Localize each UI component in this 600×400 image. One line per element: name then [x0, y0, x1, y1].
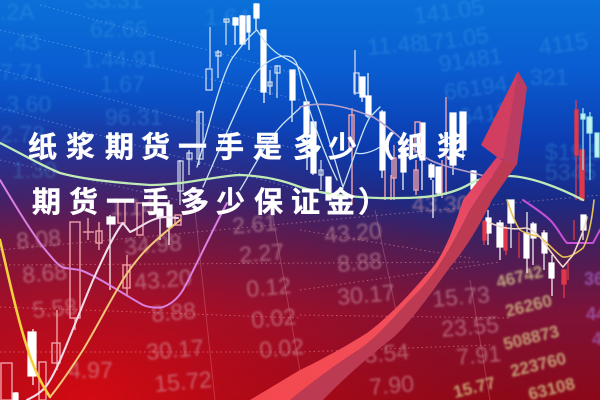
blue zone numbers: 6411 — [457, 97, 510, 130]
light numbers over purple and red zone: 15.72 — [153, 366, 213, 397]
red candles on right — [483, 100, 584, 298]
blue zone numbers: 1.67 — [100, 71, 145, 97]
blue zone numbers: 321 — [530, 64, 568, 90]
title line 1: 货 — [141, 124, 170, 166]
violet MA line — [0, 180, 227, 308]
title line 2: 金 — [326, 179, 355, 221]
light numbers over purple and red zone: 34.98 — [123, 229, 183, 260]
light numbers over purple and red zone: 0.02 — [258, 333, 305, 363]
yellow volume numbers: 508873 — [501, 322, 561, 354]
light numbers over purple and red zone: 43.20 — [323, 217, 383, 248]
title line 2: 少 — [216, 179, 245, 221]
title line 2: 多 — [180, 179, 209, 221]
blue zone numbers: 11.48 — [366, 29, 424, 60]
purple side numbers — [584, 269, 600, 349]
title line 1: 纸 — [397, 124, 426, 166]
light numbers over purple and red zone: 4.97 — [68, 357, 113, 383]
light numbers over purple and red zone: 23.55 — [440, 311, 500, 342]
light numbers over purple and red zone: 2.61 — [231, 209, 278, 239]
arrow shaft light strip — [250, 157, 503, 400]
light numbers over purple and red zone: 43.30 — [412, 191, 470, 217]
blue zone numbers: .43 — [8, 29, 40, 55]
light numbers over purple and red zone: 8.88 — [150, 297, 197, 327]
light numbers over purple and red zone: 30.17 — [336, 279, 396, 310]
title line 2: 一 — [106, 179, 135, 221]
blue zone numbers: 91481 — [437, 42, 504, 77]
blue zone numbers: 1.64 — [205, 4, 250, 30]
blue zone numbers: 2.73 — [0, 121, 45, 147]
title line 1: 期 — [105, 124, 134, 166]
yellow volume numbers: 223760 — [508, 349, 568, 381]
pale blue MA lines — [197, 30, 380, 190]
title line 2: ） — [358, 179, 387, 221]
arrow head left facet — [481, 71, 518, 160]
light numbers over purple and red zone — [15, 191, 502, 400]
blue zone numbers: 96.31 — [105, 104, 163, 130]
title line 2: 货 — [69, 179, 98, 221]
title line 1: 少 — [328, 124, 357, 166]
yellow volume numbers — [451, 262, 577, 400]
blue zone numbers: 171.05 — [417, 21, 490, 57]
rising red arrow — [250, 71, 527, 400]
arrow head right facet — [503, 71, 527, 165]
faint grid verticals — [195, 200, 490, 400]
light numbers over purple and red zone: 8.68 — [21, 258, 68, 288]
light numbers over purple and red zone: 0.02 — [250, 303, 297, 333]
light numbers over purple and red zone: 5.58 — [31, 293, 78, 323]
green MA line — [0, 143, 583, 200]
blue zone numbers: 1.44.91 — [82, 46, 159, 72]
mauve MA line — [300, 104, 500, 182]
blue zone numbers: 7.71 — [0, 59, 45, 85]
title line 1: （ — [366, 124, 395, 166]
title line 1: 是 — [253, 124, 282, 166]
light numbers over purple and red zone: 7.90 — [368, 370, 415, 400]
light numbers over purple and red zone: 43.20 — [133, 264, 193, 295]
light numbers over purple and red zone: 1.14 — [110, 194, 155, 220]
hollow pale candles — [178, 19, 359, 205]
blue zone numbers: 66194 — [442, 70, 509, 105]
teal candles on right — [581, 108, 599, 180]
blue zone numbers: 4115 — [537, 27, 590, 60]
title line 2: 期 — [32, 179, 61, 221]
light numbers over purple and red zone: 7.91 — [455, 340, 502, 370]
title line 2: 证 — [291, 179, 320, 221]
arrow shaft dark strip — [290, 160, 517, 400]
light numbers over purple and red zone: 30.17 — [145, 334, 205, 365]
title line 1: 多 — [293, 124, 322, 166]
light numbers over purple and red zone: 8.08 — [15, 224, 62, 254]
title line 2: 保 — [254, 179, 283, 221]
light numbers over purple and red zone: 0.12 — [245, 272, 292, 302]
white MA line — [27, 217, 178, 400]
yellow volume numbers: 26260 — [503, 291, 554, 321]
yellow MA lines — [0, 240, 50, 397]
yellow volume numbers: 46742 — [494, 262, 545, 292]
pink candles — [1, 97, 446, 400]
blue zone numbers: .3.60 — [0, 91, 51, 117]
light numbers over purple and red zone: 15.73 — [431, 281, 491, 312]
title line 1: 纸 — [28, 124, 57, 166]
blue zone numbers: 62.66 — [90, 16, 148, 42]
title line 1: 一 — [178, 124, 207, 166]
blue zone numbers — [0, 0, 600, 185]
light numbers over purple and red zone: 8.88 — [336, 247, 383, 277]
title line 2: 手 — [141, 179, 170, 221]
light numbers over purple and red zone: 3.54 — [363, 338, 410, 368]
light numbers over purple and red zone: 2.27 — [238, 238, 285, 268]
title line 1: 浆 — [437, 124, 466, 166]
blue zone numbers: 1.30 — [12, 157, 57, 183]
title line 1: 手 — [215, 124, 244, 166]
title line 1: 浆 — [66, 124, 95, 166]
blue zone numbers: 5345 — [545, 159, 596, 185]
title text — [28, 124, 466, 221]
